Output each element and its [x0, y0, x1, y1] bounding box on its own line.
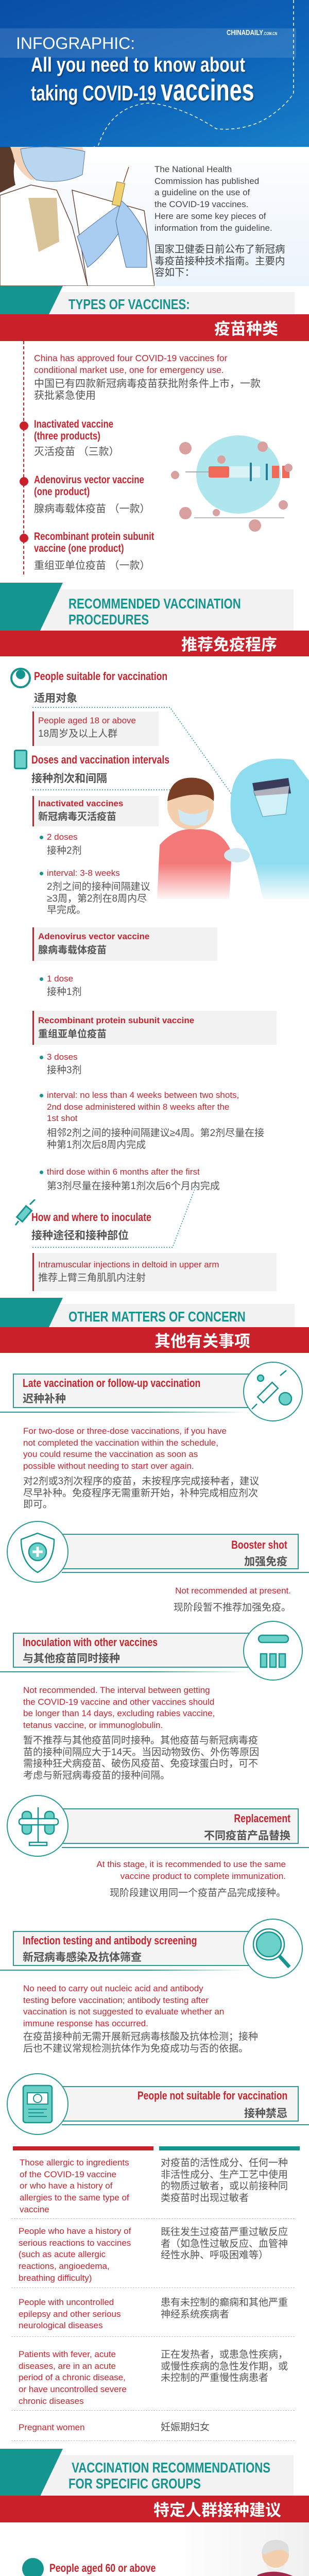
icon: shield	[7, 1521, 68, 1583]
box: adenovirus: Adenovirus vector vaccine	[38, 931, 149, 941]
table: not suitable: 或慢性疾病的急性发作期，或	[161, 2361, 288, 2372]
illustration: syringe in circle with viruses	[171, 435, 293, 532]
box: intramuscular: Intramuscular injections in deltoid in upper arm	[38, 1260, 219, 1269]
vaccine type: adenovirus: (one product)	[34, 486, 90, 498]
table: not suitable: neurological diseases	[19, 2320, 103, 2330]
icon: test tubes	[243, 1621, 303, 1681]
table: not suitable: period of a chronic disease,	[19, 2372, 126, 2382]
vaccine type: recombinant: Recombinant protein subunit	[34, 531, 154, 543]
section header: specific groups: FOR SPECIFIC GROUPS	[68, 2476, 201, 2492]
illustration: nurse with syringe	[0, 146, 154, 286]
logo: chinadaily top: CHINADAILY.COM.CN	[227, 28, 277, 37]
panel heading: booster shot: 加强免疫	[244, 1553, 287, 1569]
text: infection testing: testing before vaccination; antibody testing after	[23, 1995, 209, 2005]
table: not suitable: 患有未控制的癫痫和其他严重	[161, 2297, 288, 2308]
box: aged 18: People aged 18 or above	[38, 716, 136, 725]
bullets: recombinant	[40, 1052, 264, 1192]
bullets: inactivated: interval: 3-8 weeks	[47, 868, 120, 878]
section header: other matters: OTHER MATTERS OF CONCERN	[68, 1309, 246, 1325]
table: not suitable: Those allergic to ingredients	[20, 2158, 129, 2167]
bullet: 1 dose	[40, 974, 82, 997]
intro text: 毒疫苗接种技术指南。主要内	[154, 252, 285, 267]
text: other vaccines: Not recommended. The interval between getting	[23, 1685, 210, 1695]
panel heading: late vaccination	[0, 1362, 303, 1421]
panel heading: booster shot: Booster shot	[231, 1538, 287, 1551]
table: not suitable: serious reactions to vaccines	[19, 2238, 131, 2248]
table: not suitable: 的物质过敏者，或以前接种同	[161, 2181, 288, 2192]
text: late vaccination: For two-dose or three-dose vaccinations, if you have	[23, 1426, 227, 1436]
text: late vaccination: 对2剂或3剂次程序的疫苗，未按程序完成接种者，建议	[23, 1476, 259, 1487]
panel heading: not suitable: 接种禁忌	[244, 2105, 287, 2121]
box: intramuscular	[32, 1253, 277, 1291]
vaccine type: recombinant	[20, 531, 154, 571]
heading: people suitable: 适用对象	[34, 690, 77, 705]
panel heading: booster shot	[7, 1521, 309, 1583]
section header: recommended procedures	[0, 583, 309, 656]
box: aged 18	[32, 711, 159, 746]
group: aged 60: People aged 60 or above	[49, 2562, 156, 2574]
table: not suitable: 既往发生过疫苗严重过敏反应	[161, 2227, 288, 2238]
text: infection testing: No need to carry out nucleic acid and antibody	[23, 1984, 203, 1993]
vaccine type: inactivated: Inactivated vaccine	[34, 418, 113, 430]
box: recombinant	[32, 1011, 277, 1045]
text: replacement: At this stage, it is recommended to use the same	[96, 1859, 286, 1869]
bullets: recombinant: 2nd dose administered within 8 weeks after the	[47, 1102, 229, 1112]
intro text: Here are some key pieces of	[154, 211, 266, 221]
text: booster: 现阶段暂不推荐加强免疫。	[174, 1602, 291, 1613]
box: aged 18: 18周岁及以上人群	[38, 728, 117, 739]
bullets: inactivated: ≥3周，第2剂在8周内尽	[47, 893, 147, 904]
icon: magnifier virus	[243, 1919, 303, 1978]
section header: recommended procedures: PROCEDURES	[68, 612, 149, 628]
bullets: inactivated	[40, 832, 150, 916]
text: late vaccination: not completed the vaccination within the schedule,	[23, 1438, 218, 1448]
section header: types of vaccines	[0, 286, 309, 341]
panel heading: infection testing	[0, 1919, 303, 1978]
table: not suitable: or who have a history of	[20, 2181, 112, 2191]
section header: specific groups	[0, 2449, 309, 2522]
section header: specific groups: 特定人群接种建议	[153, 2497, 281, 2520]
approved text: conditional market use, one for emergency use.	[34, 365, 224, 375]
table: not suitable: People who have a history of	[19, 2226, 131, 2236]
box: adenovirus	[32, 927, 217, 961]
text: infection testing: vaccination is not suggested to evaluate whether an	[23, 2007, 224, 2016]
background shade for groups	[0, 2522, 309, 2576]
table: not suitable: of the COVID-19 vaccine	[20, 2170, 116, 2179]
vaccine type: recombinant: vaccine (one product)	[34, 543, 124, 554]
vaccine type: inactivated: 灭活疫苗 （三款）	[34, 446, 119, 457]
heading: people suitable	[34, 670, 167, 705]
icon: people	[10, 668, 31, 688]
text: late vaccination: you could resume the vaccination as soon as	[23, 1449, 198, 1459]
text: replacement	[96, 1859, 286, 1899]
intro text	[154, 164, 285, 279]
text: late vaccination: possible without needing to start over again.	[23, 1461, 194, 1471]
panel heading: not suitable	[7, 2073, 309, 2135]
table: not suitable: or have uncontrolled severe	[19, 2384, 127, 2394]
intro text: a guideline on the use of	[154, 188, 250, 197]
table: not suitable: 经性水肿、呼吸困难等）	[161, 2250, 268, 2261]
table: not suitable: reactions, angioedema,	[19, 2261, 110, 2271]
box: inactivated vaccines: Inactivated vaccines	[38, 799, 123, 808]
table: not suitable: Pregnant women	[19, 2422, 85, 2432]
intro area background	[0, 147, 309, 286]
text: other vaccines: tetanus vaccine, or immunoglobulin.	[23, 1720, 163, 1730]
panel heading: late vaccination: 迟种补种	[23, 1391, 66, 1406]
text: late vaccination: 尽早补种。免疫程序无需重新开始，补种完成相应剂次	[23, 1488, 258, 1499]
panel heading: other vaccines	[0, 1621, 303, 1681]
panel heading: other vaccines: Inoculation with other vaccines	[23, 1636, 158, 1649]
table: not suitable: 类疫苗时出现过敏者	[161, 2193, 249, 2204]
box: inactivated vaccines	[32, 796, 159, 826]
table: not suitable: vaccine	[20, 2205, 49, 2214]
heading: how and where	[31, 1211, 151, 1243]
heading: doses	[31, 753, 169, 786]
text: other vaccines: 考虑与新冠病毒疫苗的接种间隔。	[23, 1770, 170, 1781]
panel heading: not suitable: People not suitable for vaccination	[138, 2089, 287, 2102]
vaccine type: recombinant: 重组亚单位疫苗 （一款）	[34, 560, 150, 571]
text: other vaccines: the COVID-19 vaccine and other vaccines should	[23, 1697, 214, 1707]
text: late vaccination	[23, 1426, 259, 1510]
header banner	[0, 0, 309, 147]
text: infection testing: immune response has occurred.	[23, 2019, 148, 2028]
bullets: recombinant: interval: no less than 4 weeks between two shots,	[47, 1090, 239, 1100]
intro text: the COVID-19 vaccines.	[154, 199, 248, 209]
icon: tube rack	[7, 1795, 68, 1857]
header notch	[87, 146, 102, 147]
text: booster: Not recommended at present.	[175, 1586, 291, 1596]
box: intramuscular: 推荐上臂三角肌肌内注射	[38, 1273, 146, 1283]
table: not suitable: 妊娠期妇女	[161, 2422, 210, 2433]
intro text: information from the guideline.	[154, 223, 272, 233]
text: infection testing: 后也不建议常规检测抗体作为免疫成功与否的依据。	[23, 2043, 248, 2054]
dotted connector lines	[32, 707, 232, 793]
vaccine type: adenovirus	[20, 474, 150, 515]
vaccine type: inactivated	[20, 418, 119, 457]
table: not suitable: diseases, are in an acute	[19, 2361, 116, 2371]
vaccine type: inactivated: (three products)	[34, 430, 100, 442]
panel heading: other vaccines: 与其他疫苗同时接种	[23, 1650, 120, 1666]
section header: recommended procedures: RECOMMENDED VACCINATION	[68, 596, 241, 612]
heading: doses: Doses and vaccination intervals	[31, 753, 169, 766]
vaccine type: adenovirus: Adenovirus vector vaccine	[34, 474, 144, 486]
table: not suitable: breathing difficulty)	[19, 2273, 92, 2283]
text: other vaccines: be longer than 14 days, excluding rabies vaccine,	[23, 1708, 215, 1718]
section header: recommended procedures: 推荐免疫程序	[181, 632, 277, 655]
table: not suitable: chronic diseases	[19, 2396, 84, 2406]
illustration: elderly man	[258, 2540, 293, 2576]
bullets: recombinant: 第3剂尽量在接种第1剂次后6个月内完成	[47, 1181, 220, 1192]
icon: bottle	[14, 750, 27, 769]
intro text: The National Health	[154, 164, 232, 174]
icon: clipboard	[7, 2073, 68, 2135]
bullet: 1 dose: 1 dose	[47, 974, 73, 984]
approved text: 获批紧急使用	[34, 390, 96, 401]
title: taking COVID-19 vaccines	[31, 74, 254, 107]
table: not suitable: 者（如急性过敏反应、血管神	[161, 2239, 288, 2249]
title: All you need to know about	[31, 54, 245, 76]
text: replacement: 现阶段建议用同一个疫苗产品完成接种。	[110, 1888, 286, 1899]
bullets: recombinant: 相邻2剂之间的接种间隔建议≥4周。第2剂尽量在接	[47, 1128, 264, 1139]
box: recombinant: Recombinant protein subunit vaccine	[38, 1015, 194, 1025]
text: late vaccination: 即可。	[23, 1499, 53, 1510]
panel heading: infection testing: 新冠病毒感染及抗体筛查	[23, 1949, 142, 1964]
table: not suitable: 神经系统疾病者	[161, 2309, 229, 2320]
table: not suitable: 未控制的严重慢性病患者	[161, 2372, 268, 2383]
box: inactivated vaccines: 新冠病毒灭活疫苗	[38, 811, 116, 822]
text: other vaccines: 需接种狂犬病疫苗、破伤风疫苗、免疫球蛋白时，可不	[23, 1758, 258, 1769]
panel heading: replacement: Replacement	[234, 1812, 290, 1825]
icon: syringe small	[14, 1199, 36, 1226]
heading: doses: 接种剂次和间隔	[31, 770, 107, 786]
bullets: recombinant: 3 doses	[47, 1052, 78, 1062]
intro text: Commission has published	[154, 176, 259, 186]
vaccine type: adenovirus: 腺病毒载体疫苗 （一款）	[34, 503, 150, 515]
heading: how and where: How and where to inoculate	[31, 1211, 151, 1224]
bullets: recombinant: 种第1剂次后8周内完成	[47, 1140, 146, 1150]
bullets: recombinant: 接种3剂	[47, 1065, 82, 1076]
panel heading: replacement	[7, 1795, 309, 1857]
text: other vaccines	[23, 1685, 259, 1781]
intro text: 国家卫健委日前公布了新冠病	[154, 241, 285, 256]
table: not suitable: (such as acute allergic	[19, 2249, 106, 2259]
table: not suitable: 非活性成分、生产工艺中使用	[161, 2170, 288, 2180]
timeline dashed line	[23, 341, 24, 574]
section header: types of vaccines: TYPES OF VACCINES:	[68, 296, 190, 312]
approved text: China has approved four COVID-19 vaccines for	[34, 353, 227, 363]
bullets: recombinant: 1st shot	[47, 1113, 78, 1123]
bullets: inactivated: 2 doses	[47, 832, 78, 842]
table: not suitable	[11, 2146, 300, 2441]
text: other vaccines: 暂不推荐与其他疫苗同时接种。其他疫苗与新冠病毒疫	[23, 1735, 258, 1746]
table: not suitable: allergies to the same type of	[20, 2193, 129, 2202]
text: other vaccines: 苗的接种间隔应大于14天。当因动物致伤、外伤等原因	[23, 1747, 259, 1758]
text: replacement: vaccine product to complete immunization.	[121, 1871, 286, 1881]
heading: people suitable: People suitable for vaccination	[34, 670, 167, 683]
bullets: inactivated: 接种2剂	[47, 845, 82, 856]
title	[16, 34, 254, 107]
bullets: inactivated: 早完成。	[47, 905, 86, 916]
intro text: 容如下：	[154, 264, 195, 279]
heading: how and where: 接种途径和接种部位	[31, 1227, 129, 1243]
panel heading: replacement: 不同疫苗产品替换	[204, 1827, 290, 1843]
approved text: 中国已有四款新冠病毒疫苗获批附条件上市，一款	[34, 378, 261, 389]
table: not suitable: Patients with fever, acute	[19, 2349, 116, 2359]
icon: syringe circle	[243, 1362, 303, 1421]
bullets: inactivated: 2剂之间的接种间隔建议	[47, 882, 150, 892]
text: infection testing: 在疫苗接种前无需开展新冠病毒核酸及抗体检测；接种	[23, 2031, 258, 2042]
table: not suitable: 对疫苗的活性成分、任何一种	[161, 2158, 288, 2168]
section header: types of vaccines: 疫苗种类	[214, 316, 278, 339]
approved text	[34, 353, 261, 401]
box: adenovirus: 腺病毒载体疫苗	[38, 945, 107, 956]
box: recombinant: 重组亚单位疫苗	[38, 1029, 107, 1040]
table: not suitable: 正在发热者，或患急性疾病，	[161, 2349, 288, 2360]
title: INFOGRAPHIC:	[16, 34, 135, 53]
section header: other matters: 其他有关事项	[154, 1328, 250, 1351]
dotted connector	[32, 1187, 196, 1248]
text: infection testing	[23, 1984, 258, 2054]
table: not suitable: epilepsy and other serious	[19, 2309, 121, 2319]
bullet: 1 dose: 接种1剂	[47, 987, 82, 997]
bullets: recombinant: third dose within 6 months after the first	[47, 1167, 200, 1177]
section header: specific groups: VACCINATION RECOMMENDATIONS	[72, 2460, 270, 2476]
panel heading: infection testing: Infection testing and antibody screening	[23, 1934, 197, 1947]
group: aged 60	[22, 2558, 156, 2576]
section header: other matters	[0, 1298, 309, 1353]
illustration: boy and nurse	[157, 758, 309, 899]
text: booster	[174, 1586, 291, 1613]
panel heading: late vaccination: Late vaccination or follow-up vaccination	[23, 1377, 200, 1389]
table: not suitable: People with uncontrolled	[19, 2297, 114, 2307]
